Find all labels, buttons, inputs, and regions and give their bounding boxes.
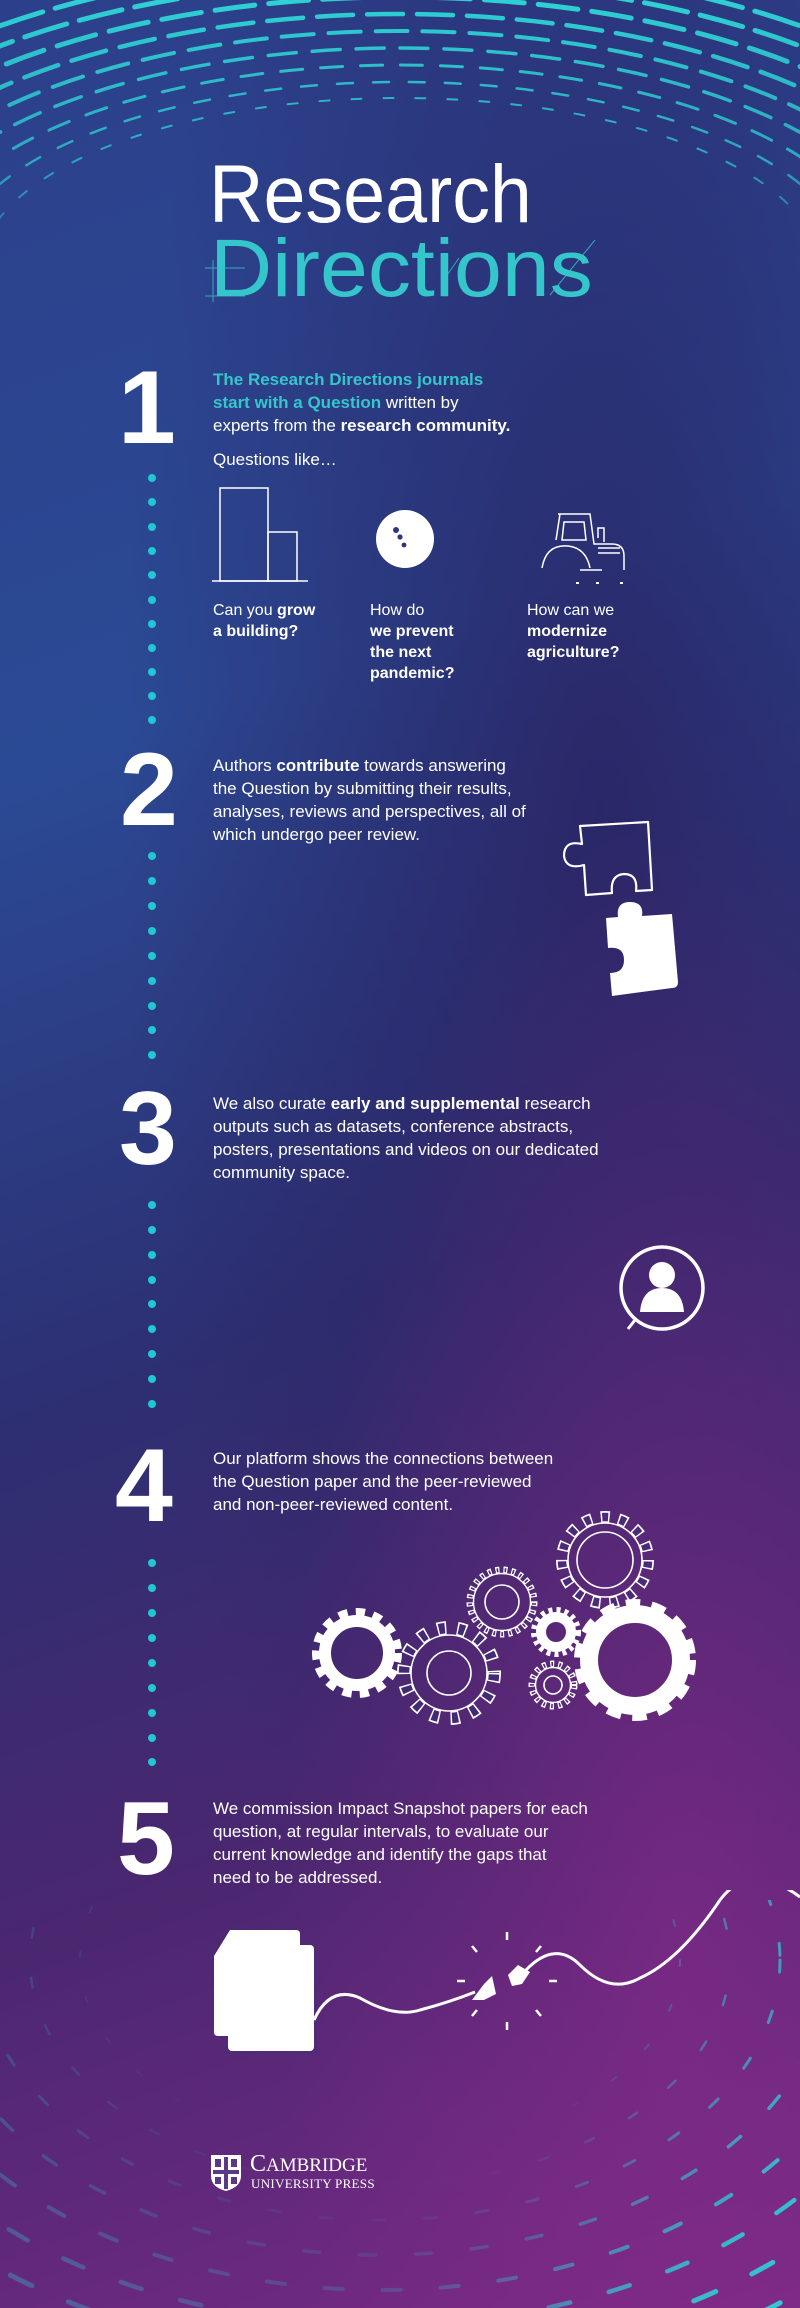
number 4: 4 [115, 1428, 173, 1544]
step 4 text [213, 1449, 553, 1514]
logo: Cambridge University Press: UNIVERSITY PRESS [251, 2176, 375, 2191]
caption: building: Can you grow [213, 602, 315, 619]
icon: virus [376, 510, 434, 568]
step 3 text: outputs such as datasets, conference abstracts, [213, 1117, 573, 1136]
step 4 text: the Question paper and the peer-reviewed [213, 1472, 531, 1491]
icon: gears [312, 1511, 696, 1725]
caption: pandemic: the next [370, 644, 431, 661]
step 5 text: We commission Impact Snapshot papers for each [213, 1799, 588, 1818]
step 1 text [213, 370, 510, 435]
step 1 text: experts from the research community. [213, 416, 510, 435]
icon: documents with plug cable [214, 1890, 800, 2054]
caption: pandemic: we prevent [370, 623, 454, 640]
logo: Cambridge University Press: CAMBRIDGE [250, 2151, 367, 2177]
step 1 text: start with a Question written by [213, 393, 459, 412]
number 1: 1 [118, 350, 176, 466]
number 2: 2 [120, 732, 178, 848]
icon: user search [619, 1245, 705, 1331]
icon: building [212, 487, 308, 582]
icon: tractor [541, 513, 625, 584]
step 2 text: analyses, reviews and perspectives, all of [213, 802, 526, 821]
caption: agriculture: How can we [527, 602, 614, 619]
step 5 text: need to be addressed. [213, 1868, 382, 1887]
step 5 text [213, 1799, 588, 1887]
step 2 text [213, 756, 526, 844]
icon: puzzle pieces [562, 820, 678, 996]
step 3 text: posters, presentations and videos on our dedicated [213, 1140, 599, 1159]
step 5 text: question, at regular intervals, to evaluate our [213, 1822, 548, 1841]
caption: agriculture: agriculture? [527, 644, 619, 661]
step 3 text: We also curate early and supplemental research [213, 1094, 591, 1113]
number 3: 3 [119, 1071, 177, 1187]
caption: pandemic: How do [370, 602, 424, 619]
step 2 text: the Question by submitting their results, [213, 779, 512, 798]
logo: Cambridge University Press [211, 2151, 375, 2191]
number 5: 5 [117, 1781, 175, 1897]
step 2 text: Authors contribute towards answering [213, 756, 506, 775]
caption: agriculture [527, 602, 619, 661]
step 4 text: and non-peer-reviewed content. [213, 1495, 453, 1514]
caption: agriculture: modernize [527, 623, 607, 640]
questions like: Questions like… [213, 450, 337, 469]
caption: building [213, 602, 316, 640]
caption: pandemic: pandemic? [370, 665, 454, 682]
step 3 text [213, 1094, 599, 1182]
step 1 text: The Research Directions journals [213, 370, 483, 389]
outline gears [404, 1517, 648, 1718]
step 5 text: current knowledge and identify the gaps that [213, 1845, 547, 1864]
step 4 text: Our platform shows the connections between [213, 1449, 553, 1468]
title: Directions [210, 223, 593, 314]
step 3 text: community space. [213, 1163, 350, 1182]
filled gears [317, 1605, 690, 1715]
title: Research [209, 149, 532, 240]
title [205, 149, 596, 314]
step 2 text: which undergo peer review. [213, 825, 420, 844]
caption: building: a building? [213, 623, 298, 640]
caption: pandemic [370, 602, 454, 682]
